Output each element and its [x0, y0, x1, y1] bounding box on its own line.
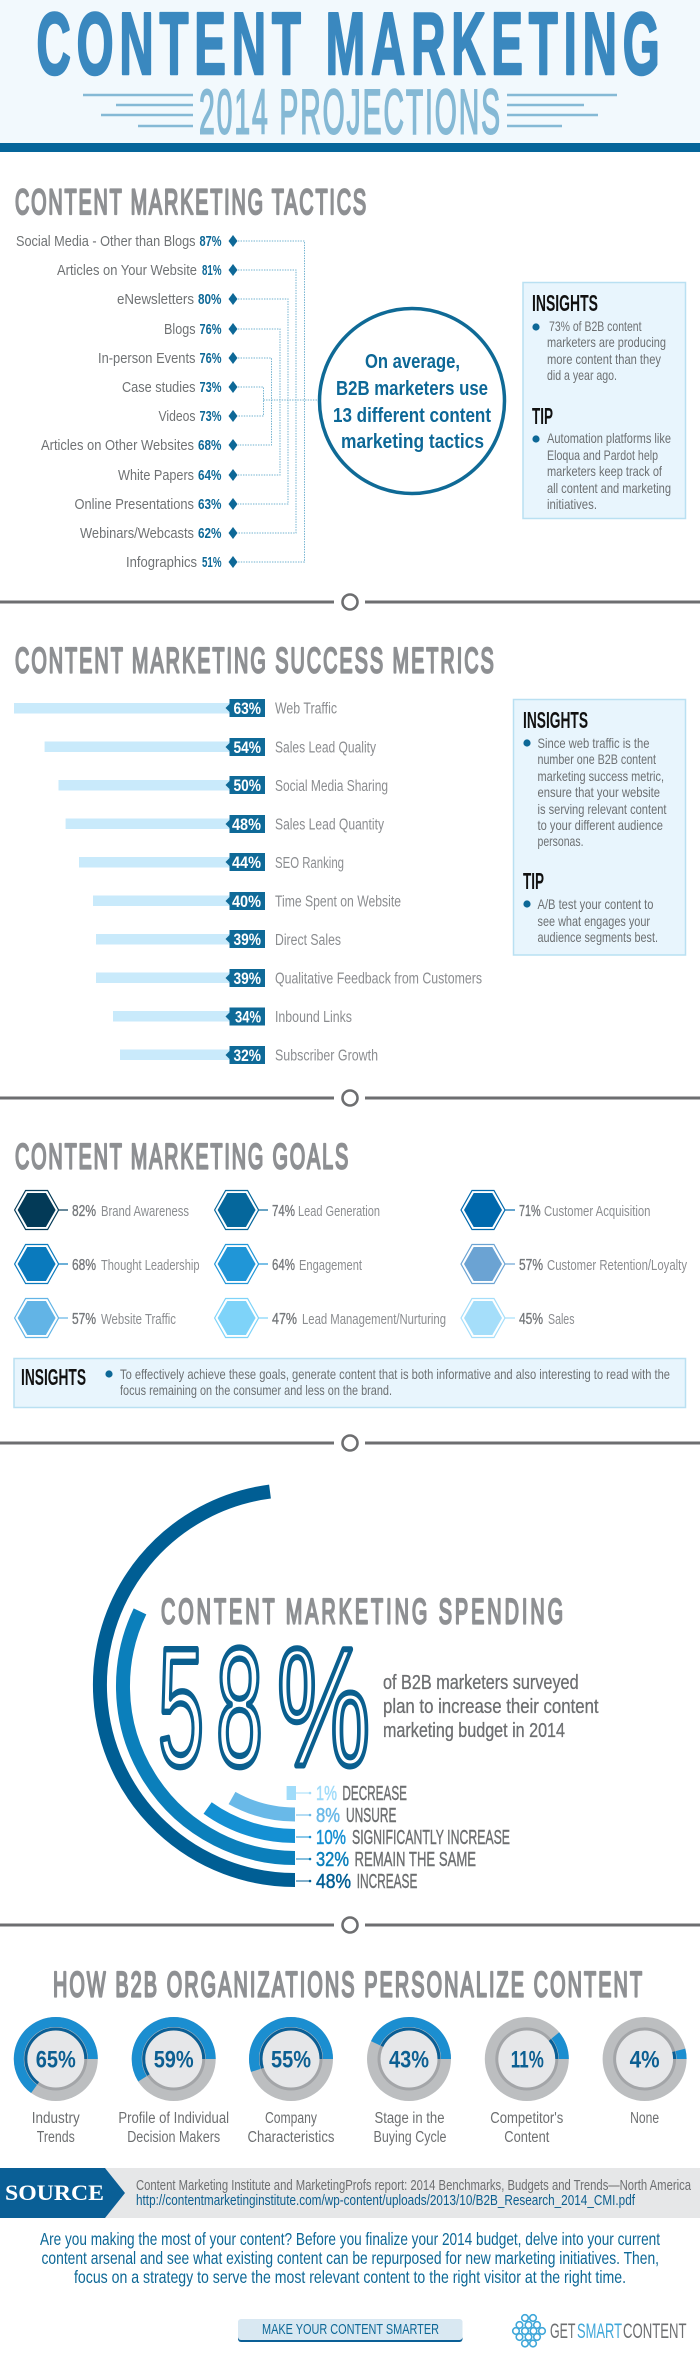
spending description: of B2B marketers surveyed: [383, 1672, 579, 1694]
goal: lead generation: Lead Generation: [298, 1203, 380, 1220]
tactics list: 51%: [202, 554, 222, 571]
closing call-to-action text: [40, 2229, 660, 2287]
bar chart: success metrics: 54%: [234, 738, 261, 757]
goal: engagement: 64%: [272, 1257, 295, 1274]
panel: tactics insights: initiatives.: [547, 496, 597, 512]
goal: lead management: [215, 1298, 446, 1338]
spending legend: INCREASE: [357, 1871, 417, 1893]
donut: none 4%: [603, 2017, 687, 2127]
tactics list: Case studies: [122, 379, 196, 396]
tactics list: Social Media - Other than Blogs: [16, 233, 196, 250]
big number 58%: 5: [158, 1614, 204, 1802]
bar chart: success metrics: Sales Lead Quality: [275, 740, 376, 756]
divider: [0, 1436, 700, 1450]
tactics center circle callout: [320, 308, 504, 494]
donut: industry trends 65%: [14, 2017, 98, 2146]
panel: metrics insights: see what engages your: [538, 913, 650, 929]
panel: metrics insights: Since web traffic is the: [538, 735, 650, 751]
goal: lead generation: [215, 1190, 380, 1230]
donut: buying cycle 43%: Stage in the: [374, 2110, 444, 2127]
donut: competitor's content 11%: 11%: [511, 2046, 544, 2074]
goal: customer acquisition: Customer Acquisition: [544, 1203, 650, 1220]
bar chart: success metrics: 34%: [235, 1008, 261, 1026]
donut: buying cycle 43%: Buying Cycle: [374, 2129, 446, 2146]
logo: get smart content: [513, 2315, 687, 2347]
bar chart: success metrics: 63%: [234, 699, 261, 718]
bar chart: success metrics: 50%: [234, 776, 261, 795]
tactics list: 87%: [200, 233, 222, 250]
tactics list: In-person Events: [98, 350, 196, 367]
panel: tactics insights: TIP: [532, 403, 553, 429]
panel: metrics insights: A/B test your content to: [538, 896, 654, 912]
heading: goals: CONTENT MARKETING GOALS: [15, 1138, 348, 1177]
spending legend: UNSURE: [346, 1805, 396, 1827]
goal: engagement: Engagement: [299, 1257, 363, 1274]
donut: none 4%: None: [630, 2110, 659, 2127]
donut: competitor's content 11%: Competitor's: [490, 2110, 564, 2127]
tactics connector lines: [238, 241, 320, 562]
goal: website traffic: [15, 1298, 176, 1338]
spending description: [383, 1672, 599, 1742]
panel: tactics insights: more content than they: [547, 351, 661, 367]
goal: customer acquisition: [461, 1190, 650, 1230]
panel: goals insights: focus remaining on the consumer and less on the brand.: [120, 1382, 392, 1398]
goal: thought leadership: Thought Leadership: [101, 1257, 200, 1274]
donut: buying cycle 43%: [367, 2017, 451, 2146]
goal: customer retention: [461, 1244, 687, 1284]
panel: tactics insights: marketers keep track of: [547, 463, 662, 479]
tactics list: Online Presentations: [74, 496, 194, 513]
panel: metrics insights: personas.: [538, 833, 584, 849]
panel: metrics insights: [514, 700, 686, 955]
spending legend: 32%: [316, 1849, 349, 1871]
tactics center circle callout: 13 different content: [333, 404, 491, 427]
spending legend: DECREASE: [342, 1783, 407, 1805]
spending legend: 1%: [316, 1783, 337, 1805]
chart: spending arcs: [100, 1492, 296, 1880]
panel: goals insights: INSIGHTS: [21, 1364, 86, 1390]
panel: tactics insights: Automation platforms like: [547, 430, 671, 446]
bar chart: success metrics: Social Media Sharing: [275, 778, 388, 795]
heading: tactics: CONTENT MARKETING TACTICS: [15, 183, 366, 223]
donut: individual decision makers 59%: Decision Makers: [127, 2129, 220, 2146]
bar chart: success metrics: Subscriber Growth: [275, 1048, 378, 1064]
tactics list: 63%: [198, 496, 222, 513]
heading: spending: CONTENT MARKETING SPENDING: [161, 1593, 563, 1632]
goal: brand awareness: Brand Awareness: [101, 1203, 189, 1220]
panel: tactics insights: INSIGHTS: [532, 290, 598, 316]
tactics list: 73%: [200, 408, 222, 425]
tactics list: White Papers: [118, 467, 194, 484]
donut: individual decision makers 59%: [118, 2017, 229, 2146]
button: [238, 2319, 462, 2342]
goal: sales: Sales: [548, 1311, 574, 1328]
logo: get smart content: SMART: [577, 2320, 622, 2343]
divider: [0, 1090, 700, 1106]
tactics list: Infographics: [126, 554, 197, 571]
logo: get smart content: GET: [550, 2320, 576, 2343]
big number 58%: [158, 1613, 370, 1802]
panel: metrics insights: INSIGHTS: [523, 707, 588, 733]
goal: engagement: [215, 1244, 363, 1284]
tactics list: 76%: [200, 350, 222, 367]
tactics center circle callout: On average,: [365, 350, 460, 373]
bar chart: success metrics: 44%: [232, 853, 261, 872]
panel: tactics insights: [523, 282, 686, 518]
spending legend: 8%: [316, 1805, 340, 1827]
panel: metrics insights: TIP: [523, 868, 544, 894]
tactics list: Videos: [158, 408, 196, 425]
bar chart: success metrics: Direct Sales: [275, 932, 341, 949]
tactics list: 73%: [200, 379, 222, 396]
donut: company characteristics 55%: Characteristics: [248, 2129, 335, 2146]
donut: competitor's content 11%: [485, 2017, 569, 2146]
donut: individual decision makers 59%: 59%: [154, 2046, 194, 2074]
tactics list: 76%: [200, 321, 222, 338]
goal: thought leadership: 68%: [72, 1257, 96, 1274]
header banner: [0, 0, 700, 152]
panel: metrics insights: number one B2B content: [538, 751, 656, 767]
big number 58%: %: [277, 1613, 370, 1802]
spending legend: 48%: [316, 1871, 351, 1893]
tactics center circle callout: B2B marketers use: [336, 377, 488, 400]
spending legend: [296, 1783, 510, 1893]
tactics list: Webinars/Webcasts: [80, 525, 194, 542]
donut: buying cycle 43%: 43%: [389, 2046, 429, 2074]
goal: lead management: 47%: [272, 1311, 297, 1328]
goal: lead management: Lead Management/Nurturing: [302, 1311, 446, 1328]
heading: success metrics: CONTENT MARKETING SUCCESS METRICS: [15, 642, 494, 681]
donut charts: [14, 2017, 687, 2146]
goal: sales: 45%: [519, 1311, 543, 1328]
panel: metrics insights: to your different audience: [538, 817, 663, 833]
goal: website traffic: 57%: [72, 1311, 96, 1328]
panel: metrics insights: marketing success metric,: [538, 768, 664, 784]
bar chart: success metrics: Qualitative Feedback from Customers: [275, 970, 482, 988]
source band: [0, 2168, 700, 2218]
panel: tactics insights: did a year ago.: [547, 367, 617, 383]
panel: goals insights: [14, 1358, 686, 1408]
tactics list: [16, 233, 238, 571]
bar chart: success metrics: Web Traffic: [275, 700, 337, 718]
goals grid: [15, 1190, 687, 1338]
panel: metrics insights: is serving relevant content: [538, 801, 667, 817]
spending legend: REMAIN THE SAME: [354, 1849, 476, 1871]
goal: thought leadership: [15, 1244, 199, 1284]
panel: metrics insights: ensure that your website: [538, 784, 660, 800]
donut: company characteristics 55%: [248, 2017, 335, 2146]
subtitle: 2014 PROJECTIONS: [199, 78, 500, 148]
bar chart: success metrics: 39%: [234, 969, 261, 988]
spending description: marketing budget in 2014: [383, 1720, 565, 1742]
goal: website traffic: Website Traffic: [101, 1311, 176, 1328]
bar chart: success metrics: [14, 699, 482, 1065]
bar chart: success metrics: SEO Ranking: [275, 855, 344, 872]
panel: tactics insights: all content and marketing: [547, 480, 671, 496]
tactics list: Blogs: [164, 321, 196, 338]
button: MAKE YOUR CONTENT SMARTER: [262, 2321, 439, 2338]
donut: company characteristics 55%: 55%: [271, 2046, 311, 2074]
goal: brand awareness: [15, 1190, 189, 1230]
spending description: plan to increase their content: [383, 1696, 599, 1718]
donut: none 4%: 4%: [630, 2046, 660, 2074]
panel: tactics insights: Eloqua and Pardot help: [547, 447, 658, 463]
donut: industry trends 65%: Industry: [32, 2110, 80, 2127]
bar chart: success metrics: 48%: [232, 815, 261, 834]
goal: sales: [461, 1298, 574, 1338]
goal: brand awareness: 82%: [72, 1203, 96, 1220]
spending legend: SIGNIFICANTLY INCREASE: [352, 1827, 510, 1849]
goal: lead generation: 74%: [272, 1203, 295, 1220]
bar chart: success metrics: Time Spent on Website: [275, 894, 401, 910]
goal: customer retention: 57%: [519, 1257, 543, 1274]
tactics list: 68%: [198, 437, 222, 454]
big number 58%: 8: [216, 1614, 263, 1802]
bar chart: success metrics: 32%: [234, 1046, 261, 1065]
tactics list: 81%: [202, 262, 222, 279]
donut: industry trends 65%: Trends: [37, 2129, 75, 2146]
tactics list: Articles on Other Websites: [41, 437, 194, 454]
tactics list: 64%: [198, 467, 222, 484]
donut: individual decision makers 59%: Profile of Individual: [118, 2110, 229, 2127]
tactics list: 62%: [198, 525, 222, 542]
tactics center circle callout: marketing tactics: [341, 430, 484, 453]
bar chart: success metrics: 40%: [232, 892, 261, 911]
panel: tactics insights: 73% of B2B content: [549, 318, 642, 334]
bar chart: success metrics: 39%: [234, 930, 261, 949]
bar chart: success metrics: Inbound Links: [275, 1009, 352, 1026]
source band: SOURCE: [5, 2180, 104, 2205]
icon: logo network: [513, 2315, 545, 2347]
divider: [0, 594, 700, 610]
spending legend: 10%: [316, 1827, 346, 1849]
tactics list: eNewsletters: [117, 291, 194, 308]
panel: tactics insights: marketers are producing: [547, 334, 666, 350]
panel: metrics insights: audience segments best.: [538, 929, 658, 945]
donut: competitor's content 11%: Content: [504, 2129, 550, 2146]
donut: industry trends 65%: 65%: [36, 2046, 76, 2074]
donut: company characteristics 55%: Company: [265, 2110, 317, 2127]
goal: customer acquisition: 71%: [519, 1203, 541, 1220]
tactics list: Articles on Your Website: [57, 262, 197, 279]
bar chart: success metrics: Sales Lead Quantity: [275, 816, 384, 834]
heading: personalize: HOW B2B ORGANIZATIONS PERSONALIZE CONTENT: [53, 1966, 642, 2005]
tactics list: 80%: [198, 291, 222, 308]
divider: [0, 1918, 700, 1932]
